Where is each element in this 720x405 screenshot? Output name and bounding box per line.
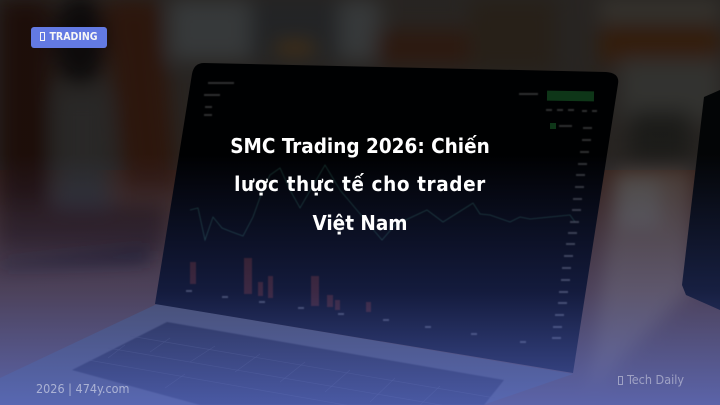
desk surface xyxy=(0,170,720,405)
title: lược thực tế cho trader xyxy=(234,172,486,196)
source footer: 2026 | 474y.com xyxy=(36,381,129,396)
category badge xyxy=(31,27,107,48)
keyboard xyxy=(72,322,504,405)
title xyxy=(230,134,490,235)
laptop screen xyxy=(155,63,618,373)
laptop base xyxy=(0,304,573,405)
volume bars xyxy=(190,258,371,312)
screen interface marks xyxy=(186,82,597,343)
price chart line xyxy=(190,165,575,240)
blurred scenery xyxy=(0,0,720,250)
green trade button xyxy=(547,91,594,101)
category badge: TRADING xyxy=(49,31,98,43)
title: SMC Trading 2026: Chiến xyxy=(230,134,490,158)
brand footer: Tech Daily xyxy=(627,372,684,387)
second device at right edge xyxy=(682,90,720,310)
title: Việt Nam xyxy=(312,211,408,235)
